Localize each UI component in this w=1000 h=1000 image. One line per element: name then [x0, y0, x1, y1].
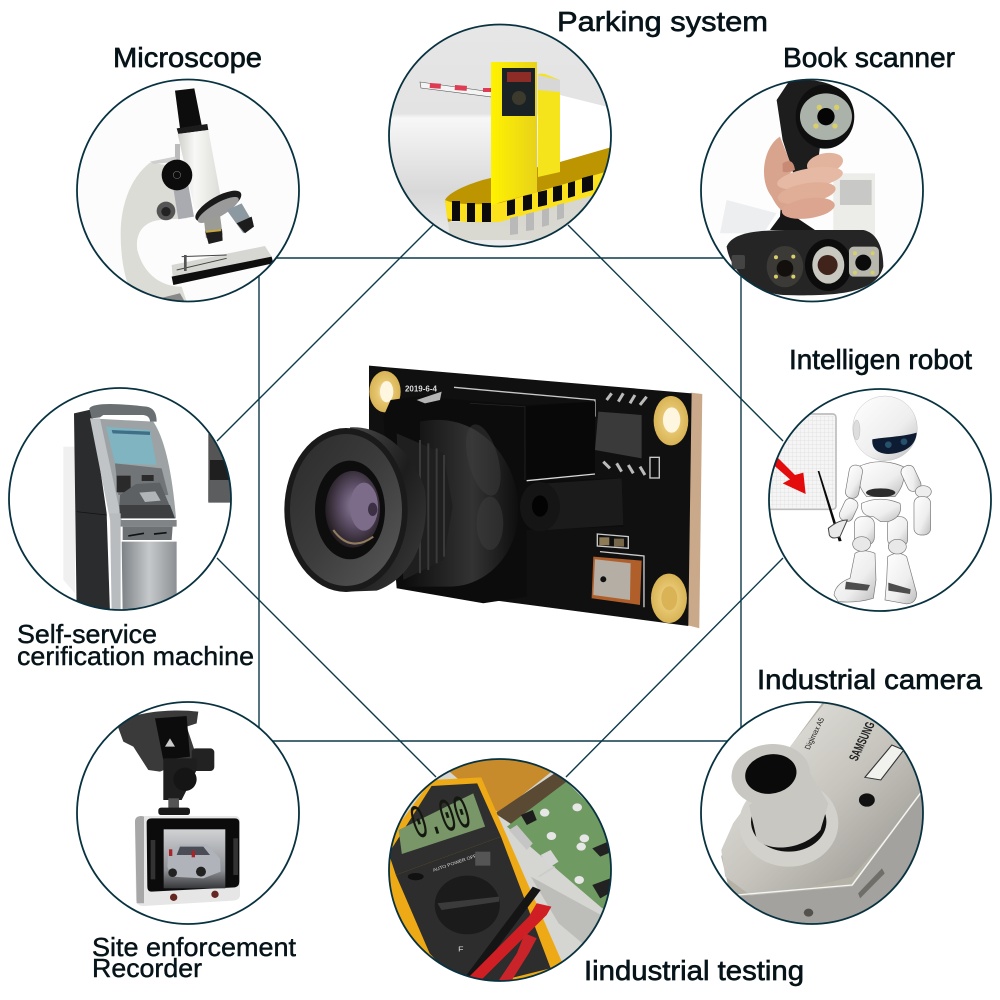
photo: multimeter and circuit board: F — [458, 945, 464, 953]
heading: industrial testing: Iindustrial testing — [584, 955, 804, 986]
photo: compact camera: SAMSUNG — [847, 720, 879, 763]
heading: site enforcement recorder: Site enforcement — [92, 932, 297, 962]
circle frame: industrial testing — [389, 759, 611, 981]
circle frame: robot — [769, 389, 991, 611]
heading: self-service certification machine: Self-service — [17, 619, 157, 649]
panel: parking system — [388, 6, 768, 248]
photo: multimeter and circuit board — [390, 760, 610, 980]
photo: multimeter and circuit board: AUTO POWER OFF — [432, 854, 478, 873]
panel: industrial testing — [380, 755, 804, 990]
photo: dash camera — [118, 710, 272, 906]
central image: camera module — [284, 366, 702, 628]
panel: self-service machine — [9, 388, 254, 671]
heading: self-service certification machine — [17, 619, 254, 671]
heading: site enforcement recorder — [92, 932, 297, 983]
heading: self-service certification machine: cerification machine — [17, 641, 254, 671]
panel: intelligent robot — [763, 344, 991, 611]
sensor housing — [383, 392, 623, 603]
heading: industrial camera: Industrial camera — [757, 664, 982, 695]
photo: multimeter and circuit board: 0.00 — [405, 788, 478, 853]
photo: microscope — [120, 88, 276, 300]
photo: parking barrier — [388, 24, 612, 248]
circle frame: microscope — [77, 80, 299, 302]
heading: book scanner: Book scanner — [783, 42, 955, 73]
circle frame: kiosk — [9, 388, 231, 610]
photo: compact camera — [721, 703, 922, 924]
circle frame: book scanner — [701, 80, 923, 302]
heading: microscope: Microscope — [113, 42, 262, 73]
panel: site enforcement recorder — [77, 702, 299, 983]
panel: industrial camera — [701, 664, 982, 930]
heading: robot: Intelligen robot — [789, 344, 972, 375]
connector lines — [217, 225, 783, 777]
circuit board: 2019-6-4 — [405, 385, 438, 394]
photo: robot with pointer — [770, 396, 932, 604]
panel: microscope — [77, 42, 299, 305]
circle frame: recorder — [77, 702, 299, 924]
lens — [284, 427, 453, 592]
panel: book scanner — [701, 42, 955, 302]
photo: kiosk machine — [64, 404, 230, 610]
heading: site enforcement recorder: Recorder — [92, 953, 202, 983]
circuit board — [369, 366, 702, 628]
photo: handheld scanner — [720, 80, 884, 296]
heading: parking system: Parking system — [557, 6, 768, 37]
circle frame: industrial camera — [701, 702, 923, 924]
photo: compact camera: Digimax A5 — [802, 716, 826, 751]
circle frame: parking — [389, 24, 611, 246]
